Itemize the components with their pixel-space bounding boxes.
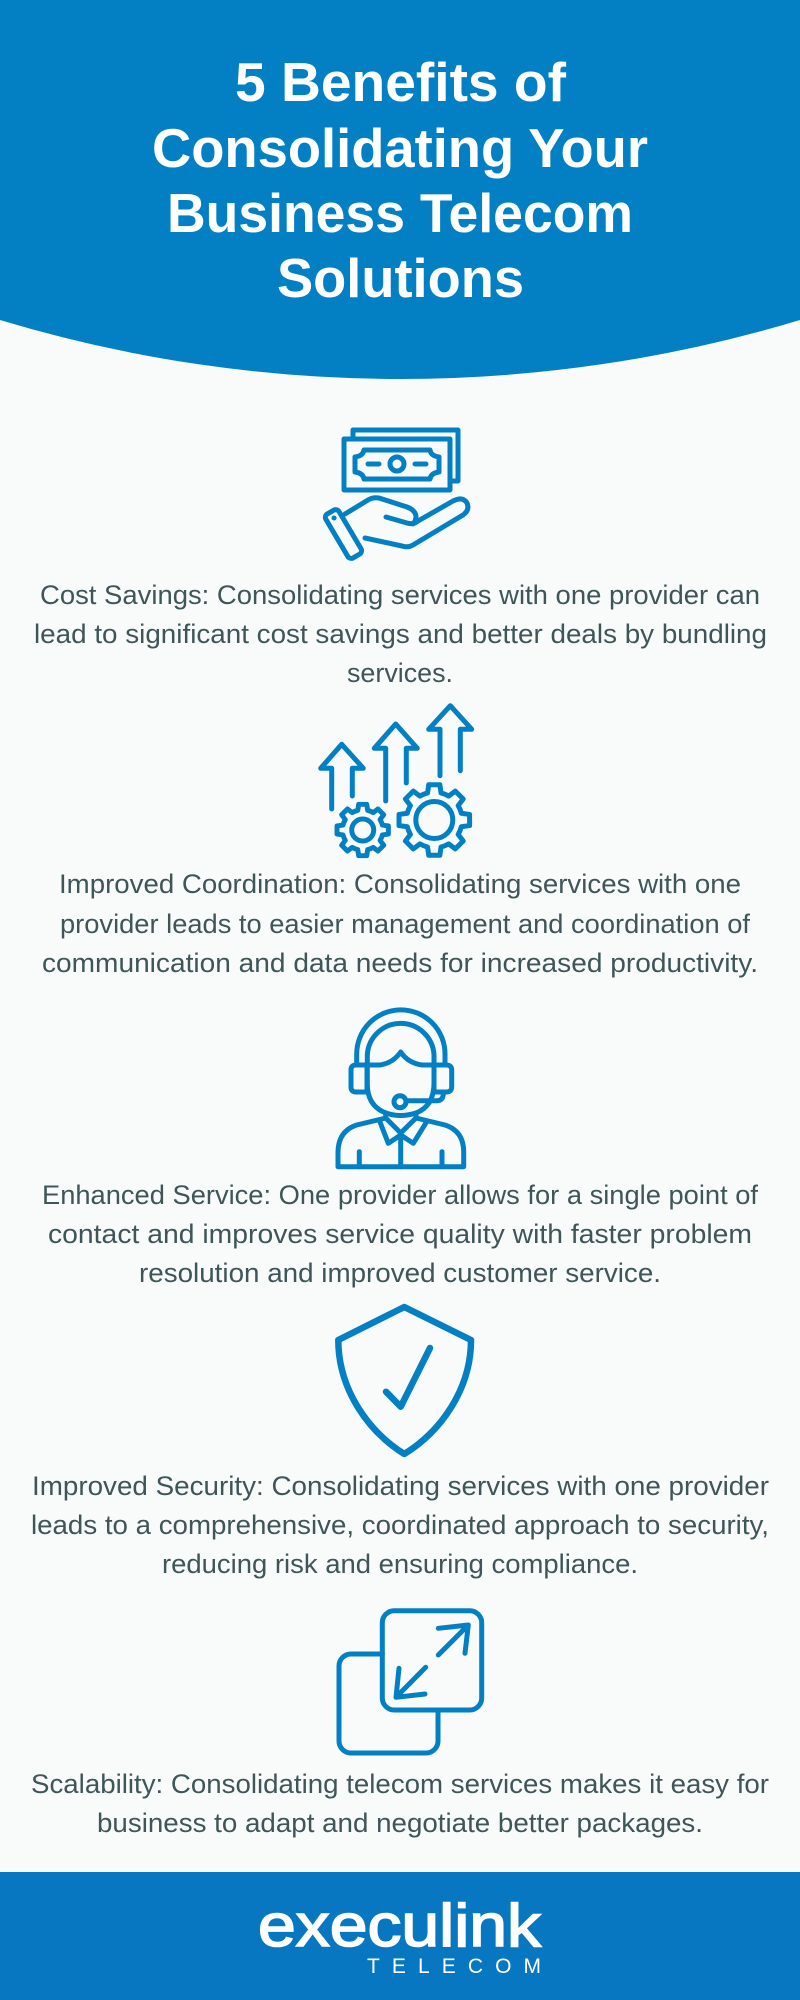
footer band [0,1872,800,2000]
text: enhanced service: contact and improves service quality with faster problem [48,1219,752,1249]
text: improved coordination: Improved Coordination: Consolidating services with one [59,869,741,899]
icon: arrows and gears [321,706,472,856]
icon: customer service agent with headset [338,1010,464,1167]
text: scalability: Scalability: Consolidating telecom services makes it easy for [31,1769,769,1799]
logo: execulink telecom [258,1892,542,1978]
text: improved security [31,1471,769,1579]
text: scalability [31,1769,769,1838]
icon: security shield with check [338,1307,471,1454]
text: enhanced service: resolution and improved customer service. [139,1258,661,1288]
title: Business Telecom [167,182,633,244]
title: 5 Benefits of [235,51,567,113]
text: improved coordination [42,869,758,978]
text: cost savings: lead to significant cost savings and better deals by bundling [34,619,767,649]
text: cost savings [34,580,767,688]
text: enhanced service: Enhanced Service: One provider allows for a single point of [42,1180,758,1210]
text: enhanced service [42,1180,758,1288]
logo: execulink telecom: TELECOM [367,1955,541,1978]
icon: scalability squares with arrows [339,1611,482,1753]
header banner with curved bottom [0,0,800,379]
text: cost savings: services. [347,658,453,688]
text: improved security: leads to a comprehensive, coordinated approach to security, [31,1510,769,1540]
title [152,51,648,309]
text: improved coordination: provider leads to easier management and coordination of [60,909,750,939]
logo: execulink telecom: execulink [258,1892,542,1959]
text: cost savings: Cost Savings: Consolidating services with one provider can [40,580,760,610]
text: scalability: business to adapt and negotiate better packages. [97,1808,703,1838]
icon: hand holding money [324,430,468,560]
text: improved coordination: communication and data needs for increased productivity. [42,948,758,978]
text: improved security: reducing risk and ensuring compliance. [162,1549,638,1579]
title: Consolidating Your [152,117,648,179]
text: improved security: Improved Security: Consolidating services with one provider [32,1471,769,1501]
title: Solutions [277,247,524,309]
